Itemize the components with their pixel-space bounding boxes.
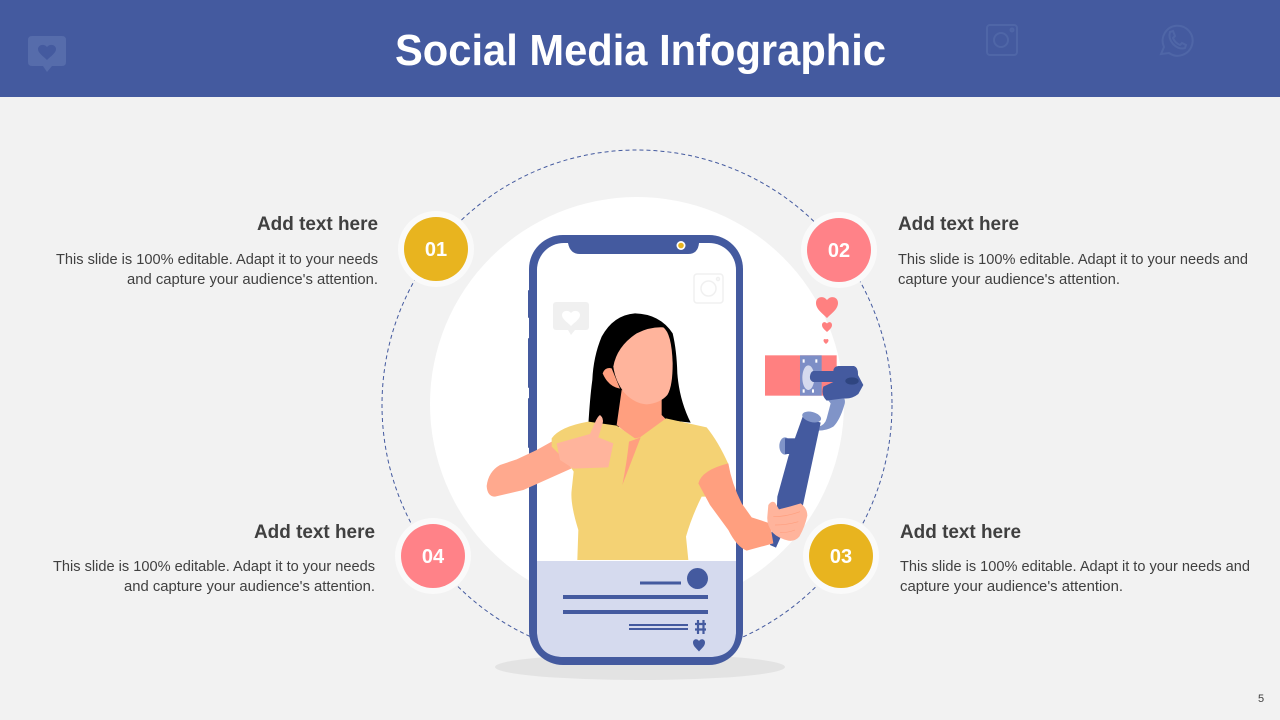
text block 04: and capture your audience's attention. <box>124 579 375 595</box>
text block 01 <box>56 214 378 288</box>
badge 03: 03 <box>830 546 852 568</box>
icon: screen instagram <box>694 274 723 303</box>
page number: 5 <box>1258 693 1264 705</box>
badge 04 <box>395 518 471 594</box>
text block 03: capture your audience's attention. <box>900 579 1123 595</box>
icon: header instagram <box>987 25 1017 55</box>
badge 01 <box>398 211 474 287</box>
phone screen <box>537 243 736 657</box>
hair <box>588 313 691 427</box>
face <box>613 327 673 404</box>
left arm <box>487 442 572 497</box>
camera screen <box>765 355 837 396</box>
badge 03 <box>803 518 879 594</box>
text block 02: capture your audience's attention. <box>898 272 1120 288</box>
text block 01: and capture your audience's attention. <box>127 272 378 288</box>
text block 01: This slide is 100% editable. Adapt it to your needs <box>56 252 378 268</box>
white backdrop circle <box>430 197 844 611</box>
icon: header whatsapp <box>1161 26 1193 56</box>
floating hearts <box>816 297 838 344</box>
gimbal handle knob <box>779 437 791 455</box>
title: Social Media Infographic <box>395 26 886 75</box>
phone illustration <box>528 235 743 665</box>
icon: screen like bubble <box>553 302 589 335</box>
gimbal head <box>810 366 863 401</box>
holding hand <box>767 502 807 541</box>
text block 02: This slide is 100% editable. Adapt it to your needs and <box>898 252 1248 268</box>
gimbal handle cap <box>801 410 822 424</box>
shirt <box>552 418 728 560</box>
thumbs-up hand <box>557 415 613 469</box>
icon: hashtag <box>695 620 706 634</box>
phone body <box>529 235 743 665</box>
badge 02 <box>801 212 877 288</box>
badge 01: 01 <box>425 239 447 261</box>
text block 02: Add text here <box>898 214 1019 235</box>
text block 02 <box>898 214 1248 288</box>
ear <box>603 368 620 389</box>
gimbal handle <box>770 417 821 548</box>
panel: post card <box>537 561 736 657</box>
neck <box>617 390 667 440</box>
badge 04: 04 <box>422 546 445 568</box>
phone side buttons <box>528 290 532 448</box>
text block 03: This slide is 100% editable. Adapt it to your needs and <box>900 559 1250 575</box>
text block 04: Add text here <box>254 522 375 543</box>
post text lines <box>563 582 708 630</box>
text block 04 <box>53 522 375 595</box>
phone camera <box>676 241 686 250</box>
dashed orbit ring <box>382 150 892 660</box>
gimbal knob <box>845 377 859 385</box>
right arm <box>698 463 773 551</box>
header band <box>0 0 1280 97</box>
icon: card heart <box>693 639 705 652</box>
text block 04: This slide is 100% editable. Adapt it to your needs <box>53 559 375 575</box>
shirt neckline <box>622 437 641 485</box>
text block 03: Add text here <box>900 522 1021 543</box>
phone notch <box>568 240 699 254</box>
text block 03 <box>900 522 1250 595</box>
illustration: woman with gimbal <box>487 313 863 560</box>
avatar dot <box>687 568 708 589</box>
floor shadow <box>495 654 785 680</box>
gimbal arm <box>818 393 845 431</box>
text block 01: Add text here <box>257 214 378 235</box>
badge 02: 02 <box>828 240 850 262</box>
icon: header like bubble <box>28 36 66 72</box>
